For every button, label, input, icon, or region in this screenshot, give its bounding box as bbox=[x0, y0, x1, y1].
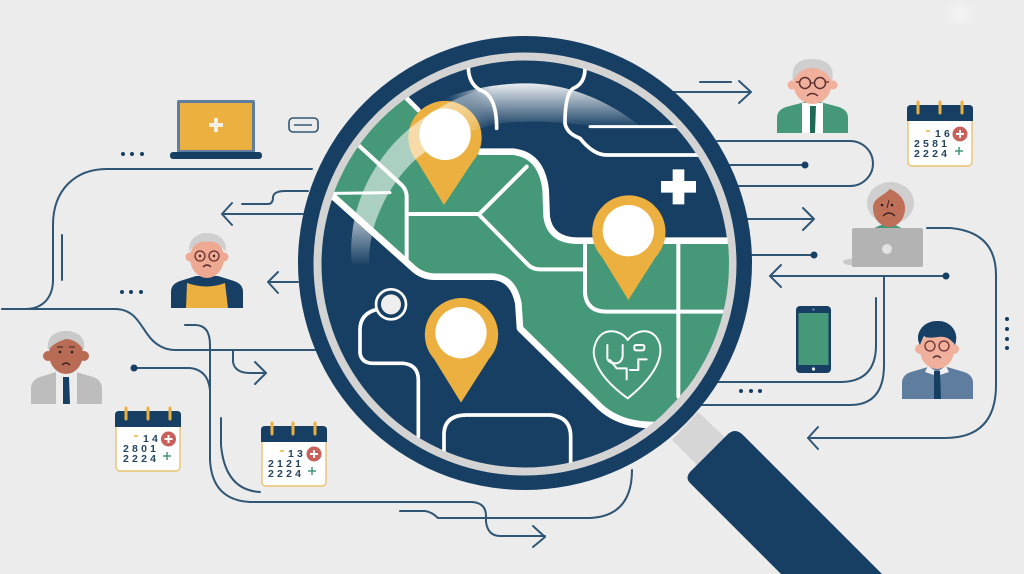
connector lines: right side bbox=[695, 82, 996, 438]
icon: medical cross bbox=[661, 169, 696, 204]
icon: stethoscope head bbox=[376, 289, 406, 319]
calendar: top right: 2224 bbox=[914, 148, 950, 160]
glass highlight: top crescent bbox=[448, 83, 638, 126]
dots: right horizontal bbox=[739, 389, 762, 393]
person: right, blue suit bbox=[902, 321, 973, 399]
person: left, yellow top bbox=[171, 233, 243, 308]
dots: left group one bbox=[121, 152, 144, 156]
map pin: right bbox=[592, 195, 665, 300]
arrow: left upper bbox=[222, 203, 303, 225]
person: top right, green suit bbox=[777, 59, 848, 133]
pin centre redraw bbox=[419, 109, 471, 160]
icon: pill button bbox=[289, 118, 318, 132]
background glow bbox=[942, 0, 978, 28]
arrow: right middle bbox=[747, 208, 814, 230]
person: left, grey suit bbox=[31, 331, 102, 404]
calendar: lower centre bbox=[261, 423, 327, 486]
calendar: lower centre: 2121 bbox=[268, 458, 304, 470]
calendar: lower left bbox=[115, 408, 181, 471]
icon: laptop with cross bbox=[170, 100, 262, 159]
map: green region bbox=[313, 97, 740, 425]
icon: heart with stethoscope bbox=[594, 331, 660, 398]
dots: right vertical bbox=[1005, 317, 1009, 350]
arrow: bottom right bbox=[533, 526, 545, 547]
dots: left group two bbox=[120, 290, 143, 294]
map: roads bbox=[333, 67, 728, 463]
magnifying glass lens bbox=[298, 36, 752, 490]
connector lines: left side bbox=[2, 169, 632, 536]
arrow: left lower bbox=[268, 272, 298, 293]
calendar: top right: 16 bbox=[935, 128, 953, 140]
person: woman behind grey laptop bbox=[843, 182, 923, 267]
calendar: lower left: 14 bbox=[143, 433, 161, 445]
arrow head: right left-pointing bbox=[770, 265, 781, 287]
map pin: lower bbox=[425, 298, 498, 403]
calendar: lower left: 2801 bbox=[123, 443, 159, 455]
magnifying glass handle bbox=[672, 412, 882, 574]
calendar: lower centre: 2224 bbox=[268, 468, 304, 480]
arrow: top right bbox=[672, 81, 751, 103]
glass highlight: left crescent bbox=[351, 90, 486, 264]
calendar: top right bbox=[907, 102, 973, 166]
arrow head: bottom right left-pointing bbox=[808, 427, 818, 449]
icon: smartphone bbox=[796, 306, 831, 373]
calendar: lower left: 2224 bbox=[123, 453, 159, 465]
map pin: upper bbox=[408, 101, 482, 205]
calendar: top right: 2581 bbox=[914, 138, 950, 150]
arrow: down-right elbow bbox=[233, 350, 266, 384]
calendar: lower centre: 13 bbox=[288, 448, 306, 460]
map inside lens bbox=[313, 67, 740, 463]
